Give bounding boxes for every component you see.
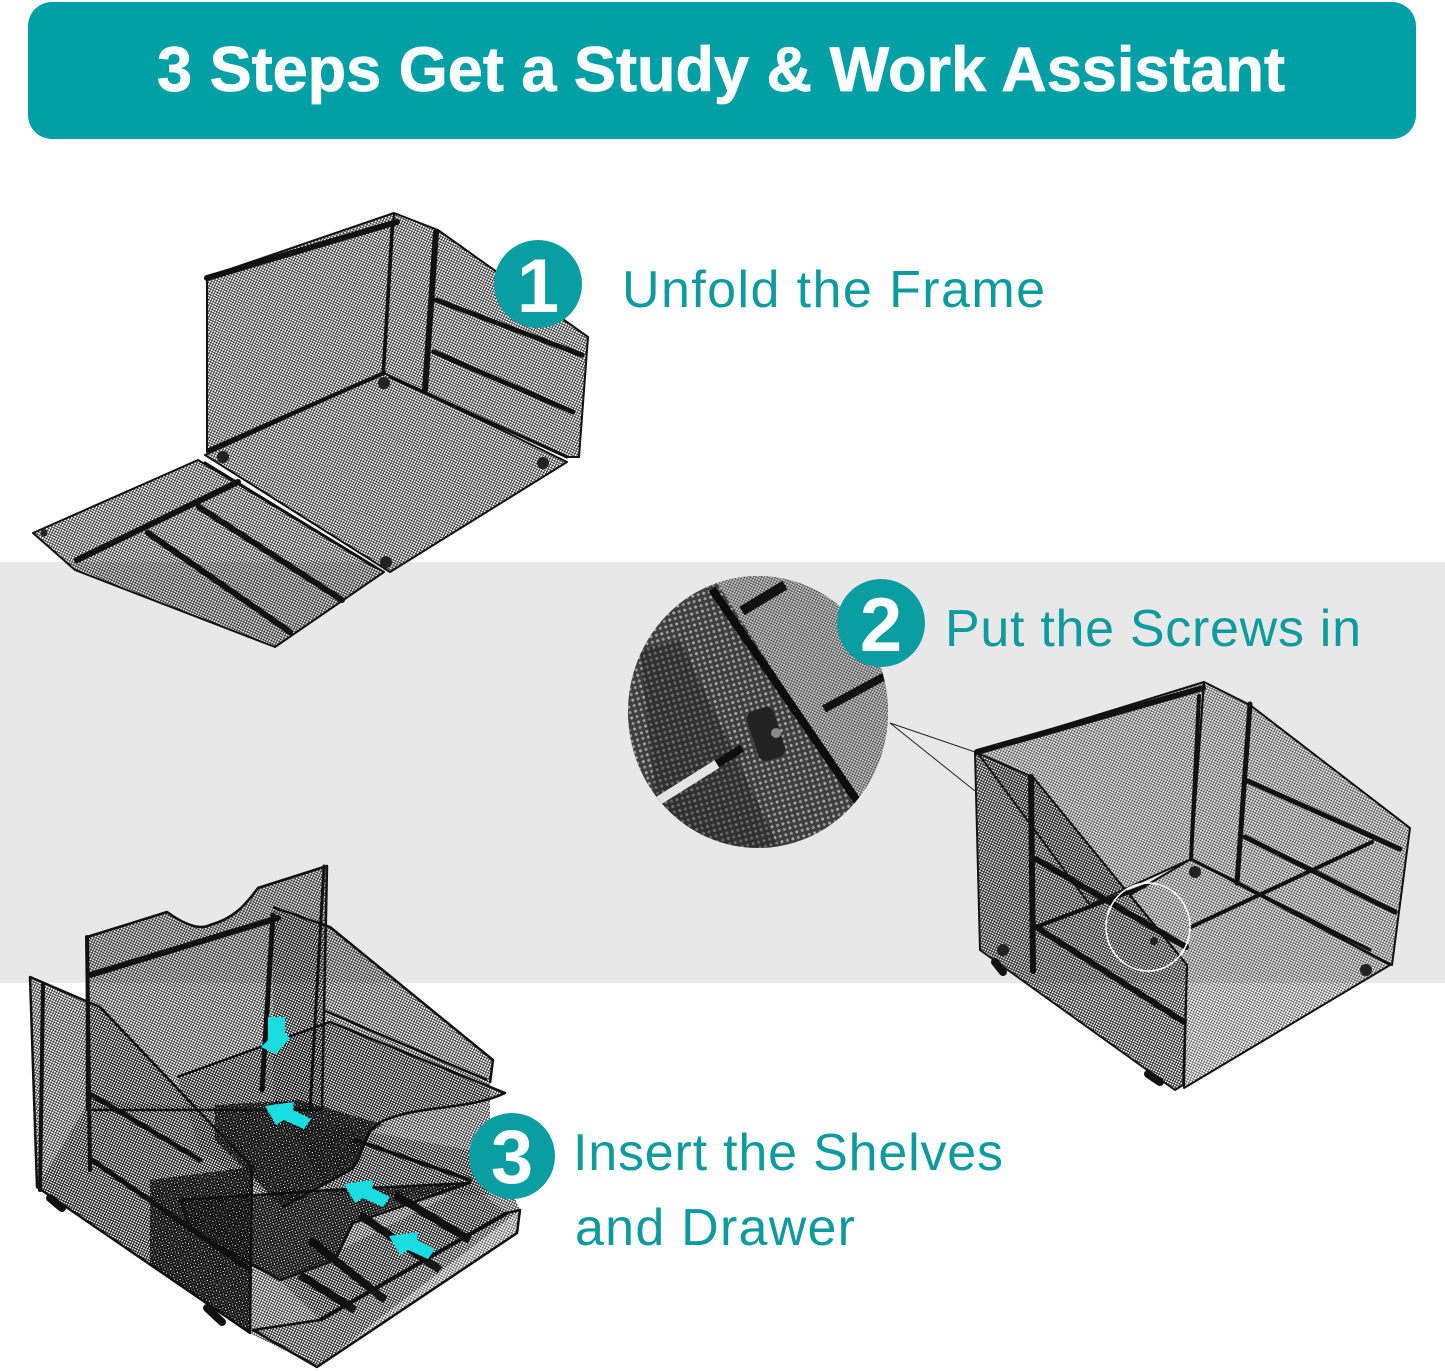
title banner [28,2,1416,139]
arrow: cyan into top shelf [265,1102,311,1129]
arrow: cyan into second shelf [344,1180,390,1207]
step 3 label [573,1124,1003,1257]
step 1 badge [494,240,582,329]
step 2 label: Put the Screws in [945,600,1361,658]
drawer interior and rim [253,1185,520,1367]
upper shelf [177,1022,505,1207]
front left panel [30,977,252,1333]
step 3 label: Insert the Shelves [573,1124,1003,1182]
step 3 badge [469,1113,555,1200]
arrow: cyan into drawer [389,1232,435,1259]
back panel [87,866,327,1110]
lower frame floor [37,1100,520,1367]
title banner: 3 Steps Get a Study & Work Assistant [157,35,1285,105]
step 2 badge [837,579,925,668]
arrow: cyan down [261,1017,290,1054]
step 1 image: unfolded frame [33,213,588,647]
step 1 label: Unfold the Frame [622,261,1045,319]
right panel [273,907,493,1195]
lower shelf [180,1183,470,1280]
step 2 image: assembled frame [975,682,1410,1090]
step 2 badge: 2 [860,583,902,668]
step 1 badge: 1 [517,244,559,329]
step 3 badge: 3 [491,1115,533,1200]
grey band behind step 2 [0,562,1445,983]
step 3 image: shelves and drawer [30,866,520,1367]
step 2 highlight circle [1106,883,1190,971]
step 2 zoom lens [625,573,892,853]
step 3 label: and Drawer [575,1199,855,1257]
step 2 connector lines [890,723,975,791]
